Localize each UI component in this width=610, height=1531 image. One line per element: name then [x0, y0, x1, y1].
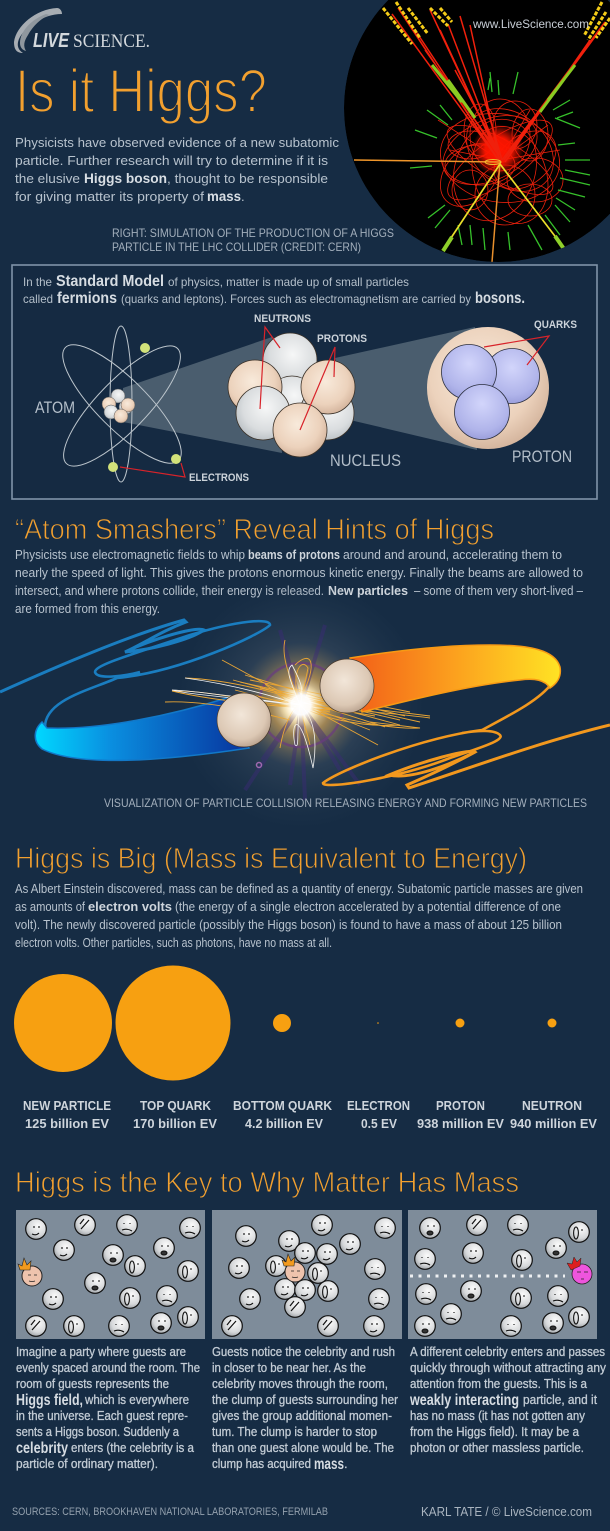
column text: weakly interacting: weakly interacting [409, 1392, 519, 1409]
atom smashers text: Physicists use electromagnetic fields to whip [15, 548, 245, 562]
intro text: Physicists have observed evidence of a new subatomic [15, 135, 340, 150]
column text: clump: Guests notice the celebrity and rush [212, 1344, 395, 1359]
column text: guests: Imagine a party where guests are [16, 1344, 186, 1359]
column text: clump [212, 1344, 399, 1473]
diagram labels: NEUTRONS [254, 313, 311, 325]
column text: weakly interacting: particle, and it [523, 1392, 597, 1407]
mass text: electron volts. Other particles, such as photons, have no mass at all. [15, 936, 332, 950]
red particle blob [472, 124, 524, 176]
diagram labels: PROTONS [317, 333, 367, 345]
proton: left [217, 693, 271, 747]
column text: clump: mass [314, 1456, 344, 1473]
image caption [112, 226, 394, 254]
chart labels: 170 billion EV [133, 1116, 217, 1131]
column text: guests: celebrity [16, 1440, 68, 1457]
chart labels: ELECTRON [347, 1098, 410, 1113]
energy glow [176, 580, 426, 830]
panel intro text: fermions [57, 290, 117, 307]
green ticks [410, 72, 590, 250]
intro text: mass [207, 188, 241, 204]
chart labels: PROTON [436, 1098, 485, 1113]
diagram labels: QUARKS [534, 319, 577, 331]
atom smashers text: are formed from this energy. [15, 602, 160, 616]
diagram: atom [48, 326, 196, 482]
diagram labels: ELECTRONS [189, 472, 249, 484]
column text: weakly interacting: attention from the guests. This is a [410, 1376, 588, 1391]
diagram labels: ATOM [35, 398, 75, 417]
logo: Live Science: SCIENCE. [73, 31, 150, 52]
intro text: Higgs boson [84, 170, 167, 186]
atom smashers text: around and around, accelerating them to [343, 548, 562, 562]
column text: guests: room of guests represents the [16, 1376, 169, 1391]
panel intro text: In the [23, 275, 52, 289]
pink celebrity [567, 1257, 592, 1284]
red curled tracks [438, 98, 564, 226]
chart labels: 4.2 billion EV [245, 1116, 323, 1131]
yellow jet ends [383, 2, 610, 44]
panel intro text: bosons. [475, 290, 525, 307]
image caption: RIGHT: SIMULATION OF THE PRODUCTION OF A HIGGS [112, 226, 394, 240]
website url: www.LiveScience.com [472, 17, 589, 31]
image: simulated Higgs collision tracks [344, 0, 610, 262]
column text: weakly interacting [409, 1344, 606, 1455]
heading: key to mass: Higgs is the Key to Why Matter Has Mass [15, 1167, 519, 1199]
purple rays [245, 625, 360, 800]
column text: clump: clump has acquired [212, 1456, 311, 1471]
chart labels: NEW PARTICLE [23, 1098, 111, 1113]
column text: clump: celebrity moves through the room, [212, 1376, 388, 1391]
diagram labels: PROTON [512, 447, 572, 466]
column text: weakly interacting: photon or other massless particle. [410, 1440, 584, 1455]
diagram: nucleus [228, 333, 355, 457]
intro text: . [241, 189, 245, 204]
diagram: proton with quarks [427, 327, 549, 449]
panel: massless celebrity passes through [408, 1210, 597, 1339]
white-hot core [279, 683, 323, 727]
purple ring [259, 663, 343, 747]
panel: guests cluster around celebrity [212, 1210, 402, 1339]
chart labels: 940 million EV [510, 1116, 597, 1131]
celebrity in clump [282, 1254, 305, 1282]
diagram labels: NUCLEUS [330, 451, 401, 470]
image caption: PARTICLE IN THE LHC COLLIDER (CREDIT: CERN) [112, 240, 361, 254]
column text: guests: sents a Higgs boson. Suddenly a [16, 1424, 180, 1439]
zoom beams [123, 327, 477, 453]
mass text: electron volts [88, 899, 172, 914]
heading: higgs is big: Higgs is Big (Mass is Equivalent to Energy) [15, 843, 527, 875]
column text: guests [16, 1344, 200, 1471]
proton: right [320, 659, 374, 713]
column text: guests: which is everywhere [84, 1392, 189, 1407]
column text: weakly interacting: from the Higgs field). It may be a [410, 1424, 580, 1439]
mass text: volt). The newly discovered particle (possibly the Higgs boson) is found to have a mass of about 125 billion [15, 918, 562, 932]
blue beam tube [35, 697, 249, 760]
footer: credit: KARL TATE / © LiveScience.com [421, 1504, 592, 1519]
column text: clump: than one guest alone would be. The [212, 1440, 394, 1455]
mass text: as amounts of [15, 900, 85, 914]
intro text: , thought to be responsible [167, 171, 328, 186]
green jet segments [432, 65, 575, 118]
atom smashers text: intersect, and where protons collide, their energy is released. [15, 584, 324, 598]
intro text [15, 135, 340, 204]
orange beam tube [350, 645, 560, 712]
panel: standard model [12, 265, 597, 499]
column text: clump: . [344, 1456, 348, 1471]
panel intro text: (quarks and leptons). Forces such as electromagnetism are carried by [121, 292, 471, 306]
panel intro text [23, 273, 525, 307]
column text: guests: particle of ordinary matter). [16, 1456, 158, 1471]
blue beam swirl [0, 620, 270, 727]
column text: guests: in the universe. Each guest repre- [16, 1408, 188, 1423]
mass text [15, 882, 583, 950]
orange and yellow tracks [354, 160, 564, 262]
intro text: particle. Further research will try to determine if it is [15, 153, 329, 168]
orange beam swirl [323, 683, 610, 788]
celebrity [18, 1258, 42, 1286]
chart labels: TOP QUARK [140, 1098, 212, 1113]
column text: guests: evenly spaced around the room. The [16, 1360, 200, 1375]
chart labels: 938 million EV [417, 1116, 504, 1131]
atom smashers text [15, 547, 583, 616]
atom smashers text: nearly the speed of light. This gives the protons enormous kinetic energy. Finally the beams are allowed to [15, 566, 583, 580]
logo: Live Science: LIVE [33, 30, 70, 52]
leader lines [120, 327, 549, 477]
chart labels: 125 billion EV [25, 1116, 109, 1131]
footer: sources: SOURCES: CERN, BROOKHAVEN NATIONAL LABORATORIES, FERMILAB [12, 1506, 328, 1518]
mass text: (the energy of a single electron accelerated by a potential difference of one [175, 900, 561, 914]
title: Is it Higgs? [15, 57, 267, 125]
chart labels [23, 1098, 597, 1131]
column text: guests: Higgs field, [16, 1392, 83, 1409]
panel intro text: of physics, matter is made up of small particles [168, 275, 409, 289]
panel intro text: Standard Model [56, 273, 164, 290]
column text: clump: tum. The clump is harder to stop [212, 1424, 377, 1439]
diagram labels [35, 313, 577, 484]
atom smashers text: beams of protons [248, 547, 340, 562]
chart labels: 0.5 EV [361, 1116, 397, 1131]
dotted path [410, 1274, 565, 1278]
column text: clump: the clump of guests surrounding her [212, 1392, 399, 1407]
chart: particle mass circles [14, 966, 556, 1080]
intro text: for giving matter its property of [15, 189, 204, 204]
atom smashers text: New particles [328, 583, 408, 598]
panel intro text: called [23, 292, 53, 306]
column text: guests: enters (the celebrity is a [71, 1440, 195, 1455]
chart labels: NEUTRON [522, 1098, 582, 1113]
chart labels: BOTTOM QUARK [233, 1098, 333, 1113]
white sparks [172, 665, 315, 768]
column text: clump: in closer to be near her. As the [212, 1360, 366, 1375]
illustration: proton collision [0, 580, 610, 830]
logo: Live Science [14, 8, 150, 53]
atom smashers text: – some of them very short-lived – [414, 584, 583, 598]
panel: party guests evenly spaced [16, 1210, 205, 1339]
heading: atom smashers: “Atom Smashers” Reveal Hints of Higgs [15, 514, 494, 546]
column text: weakly interacting: has no mass (it has not gotten any [410, 1408, 585, 1423]
intro text: the elusive [15, 171, 80, 186]
red jets [392, 8, 605, 162]
orange sparks [165, 640, 430, 748]
column text: clump: gives the group additional momen- [212, 1408, 392, 1423]
